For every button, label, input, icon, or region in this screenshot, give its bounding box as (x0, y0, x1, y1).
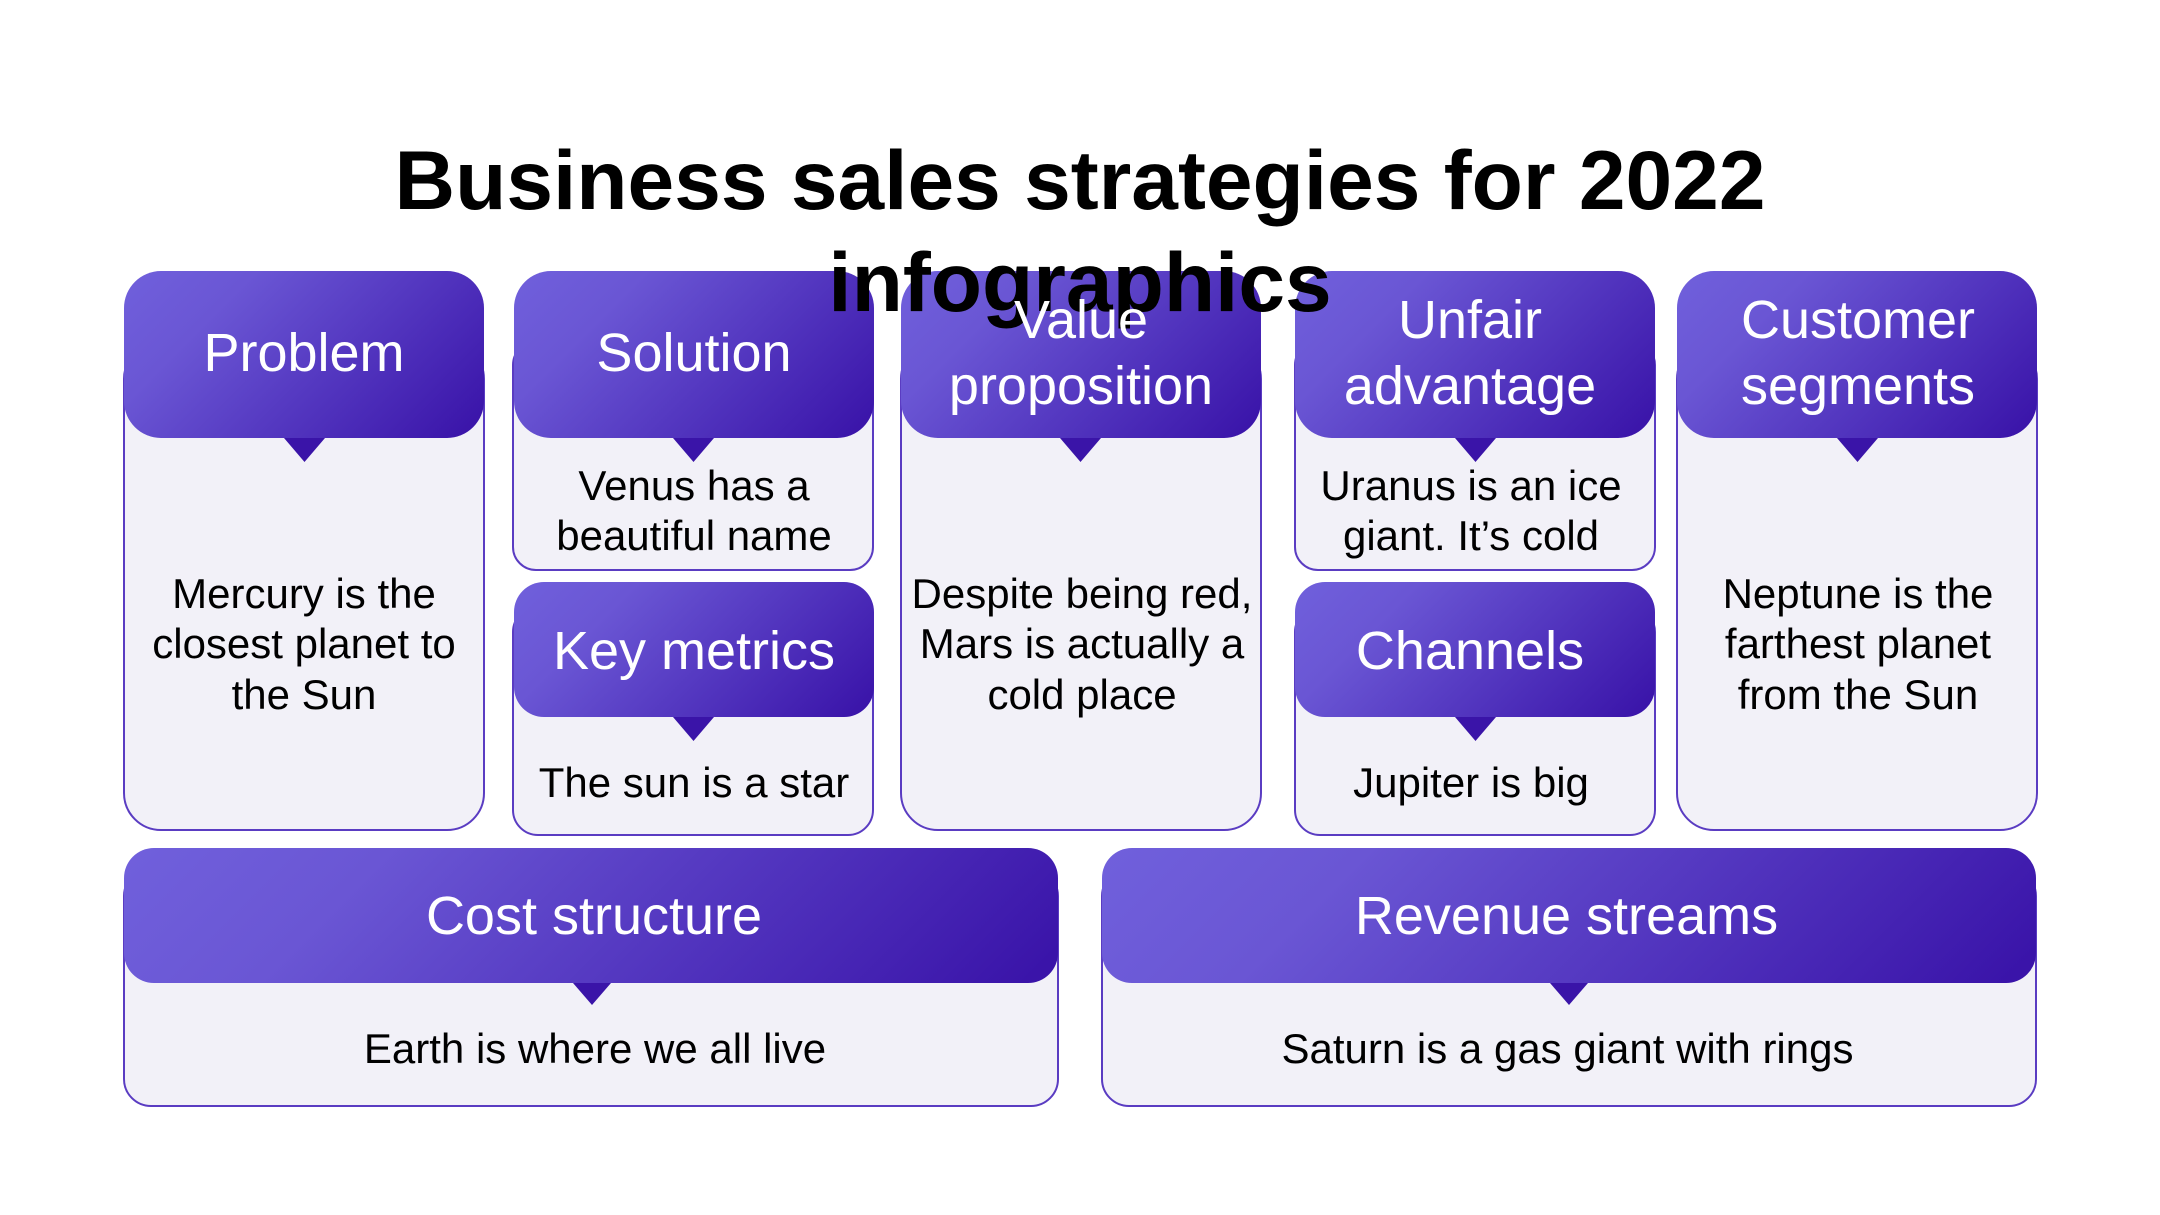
solution pointer (673, 438, 714, 462)
title (395, 133, 1765, 329)
customer segments body (1676, 341, 2038, 831)
customer segments heading: segments (1741, 356, 1975, 416)
problem text: Mercury is the (172, 570, 436, 617)
problem text (152, 570, 456, 718)
channels text: Jupiter is big (1353, 758, 1589, 806)
key metrics body (512, 606, 874, 836)
customer segments pointer (1837, 438, 1878, 462)
panel: solution (512, 271, 874, 571)
panel: key metrics (512, 582, 874, 836)
channels pointer (1455, 717, 1496, 741)
customer segments heading (1741, 290, 1975, 416)
problem text: closest planet to (152, 620, 456, 667)
problem pointer (284, 438, 325, 462)
key metrics text: The sun is a star (539, 758, 849, 806)
cost structure pointer (573, 983, 611, 1005)
cost structure text: Earth is where we all live (364, 1024, 826, 1072)
solution body (512, 341, 874, 571)
value proposition header (901, 271, 1261, 438)
unfair advantage header (1295, 271, 1655, 438)
value proposition text: Despite being red, (912, 570, 1252, 617)
value proposition text: Mars is actually a (920, 620, 1244, 667)
cost structure header (124, 848, 1058, 983)
revenue streams text: Saturn is a gas giant with rings (1282, 1024, 1853, 1072)
unfair advantage heading: Unfair (1398, 290, 1542, 350)
channels heading: Channels (1356, 620, 1584, 680)
unfair advantage text: giant. It’s cold (1343, 512, 1599, 559)
unfair advantage body (1294, 341, 1656, 571)
solution text: beautiful name (556, 512, 832, 559)
channels body (1294, 606, 1656, 836)
solution heading: Solution (596, 323, 792, 383)
customer segments text: from the Sun (1738, 671, 1978, 718)
value proposition heading: Value (1014, 290, 1148, 350)
key metrics heading: Key metrics (553, 620, 835, 680)
customer segments text: Neptune is the (1723, 570, 1993, 617)
panel: channels (1294, 582, 1656, 836)
customer segments header (1677, 271, 2037, 438)
revenue streams header (1102, 848, 2036, 983)
problem text: the Sun (232, 671, 376, 718)
panel: cost structure (123, 848, 1059, 1107)
solution text (556, 462, 832, 559)
title: infographics (828, 235, 1332, 329)
unfair advantage heading (1344, 290, 1596, 416)
unfair advantage text: Uranus is an ice (1320, 462, 1622, 509)
customer segments text: farthest planet (1725, 620, 1991, 667)
cost structure heading: Cost structure (426, 886, 762, 946)
value proposition text (912, 570, 1252, 718)
key metrics header (514, 582, 874, 717)
solution text: Venus has a (578, 462, 810, 509)
revenue streams heading: Revenue streams (1355, 886, 1778, 946)
value proposition pointer (1060, 438, 1101, 462)
value proposition heading (949, 290, 1213, 416)
key metrics pointer (673, 717, 714, 741)
panel: problem (123, 271, 485, 831)
revenue streams pointer (1550, 983, 1588, 1005)
problem body (123, 341, 485, 831)
cost structure body (123, 868, 1059, 1107)
title: Business sales strategies for 2022 (395, 133, 1765, 227)
problem header (124, 271, 484, 438)
panel: unfair advantage (1294, 271, 1656, 571)
value proposition body (900, 341, 1262, 831)
panel: revenue streams (1101, 848, 2037, 1107)
channels header (1295, 582, 1655, 717)
panel: customer segments (1676, 271, 2038, 831)
unfair advantage text (1320, 462, 1622, 559)
problem heading: Problem (203, 323, 405, 383)
revenue streams body (1101, 868, 2037, 1107)
customer segments heading: Customer (1741, 290, 1975, 350)
value proposition heading: proposition (949, 356, 1213, 416)
solution header (514, 271, 874, 438)
panel: value proposition (900, 271, 1262, 831)
unfair advantage heading: advantage (1344, 356, 1596, 416)
unfair advantage pointer (1455, 438, 1496, 462)
customer segments text (1723, 570, 1993, 718)
value proposition text: cold place (987, 671, 1177, 718)
